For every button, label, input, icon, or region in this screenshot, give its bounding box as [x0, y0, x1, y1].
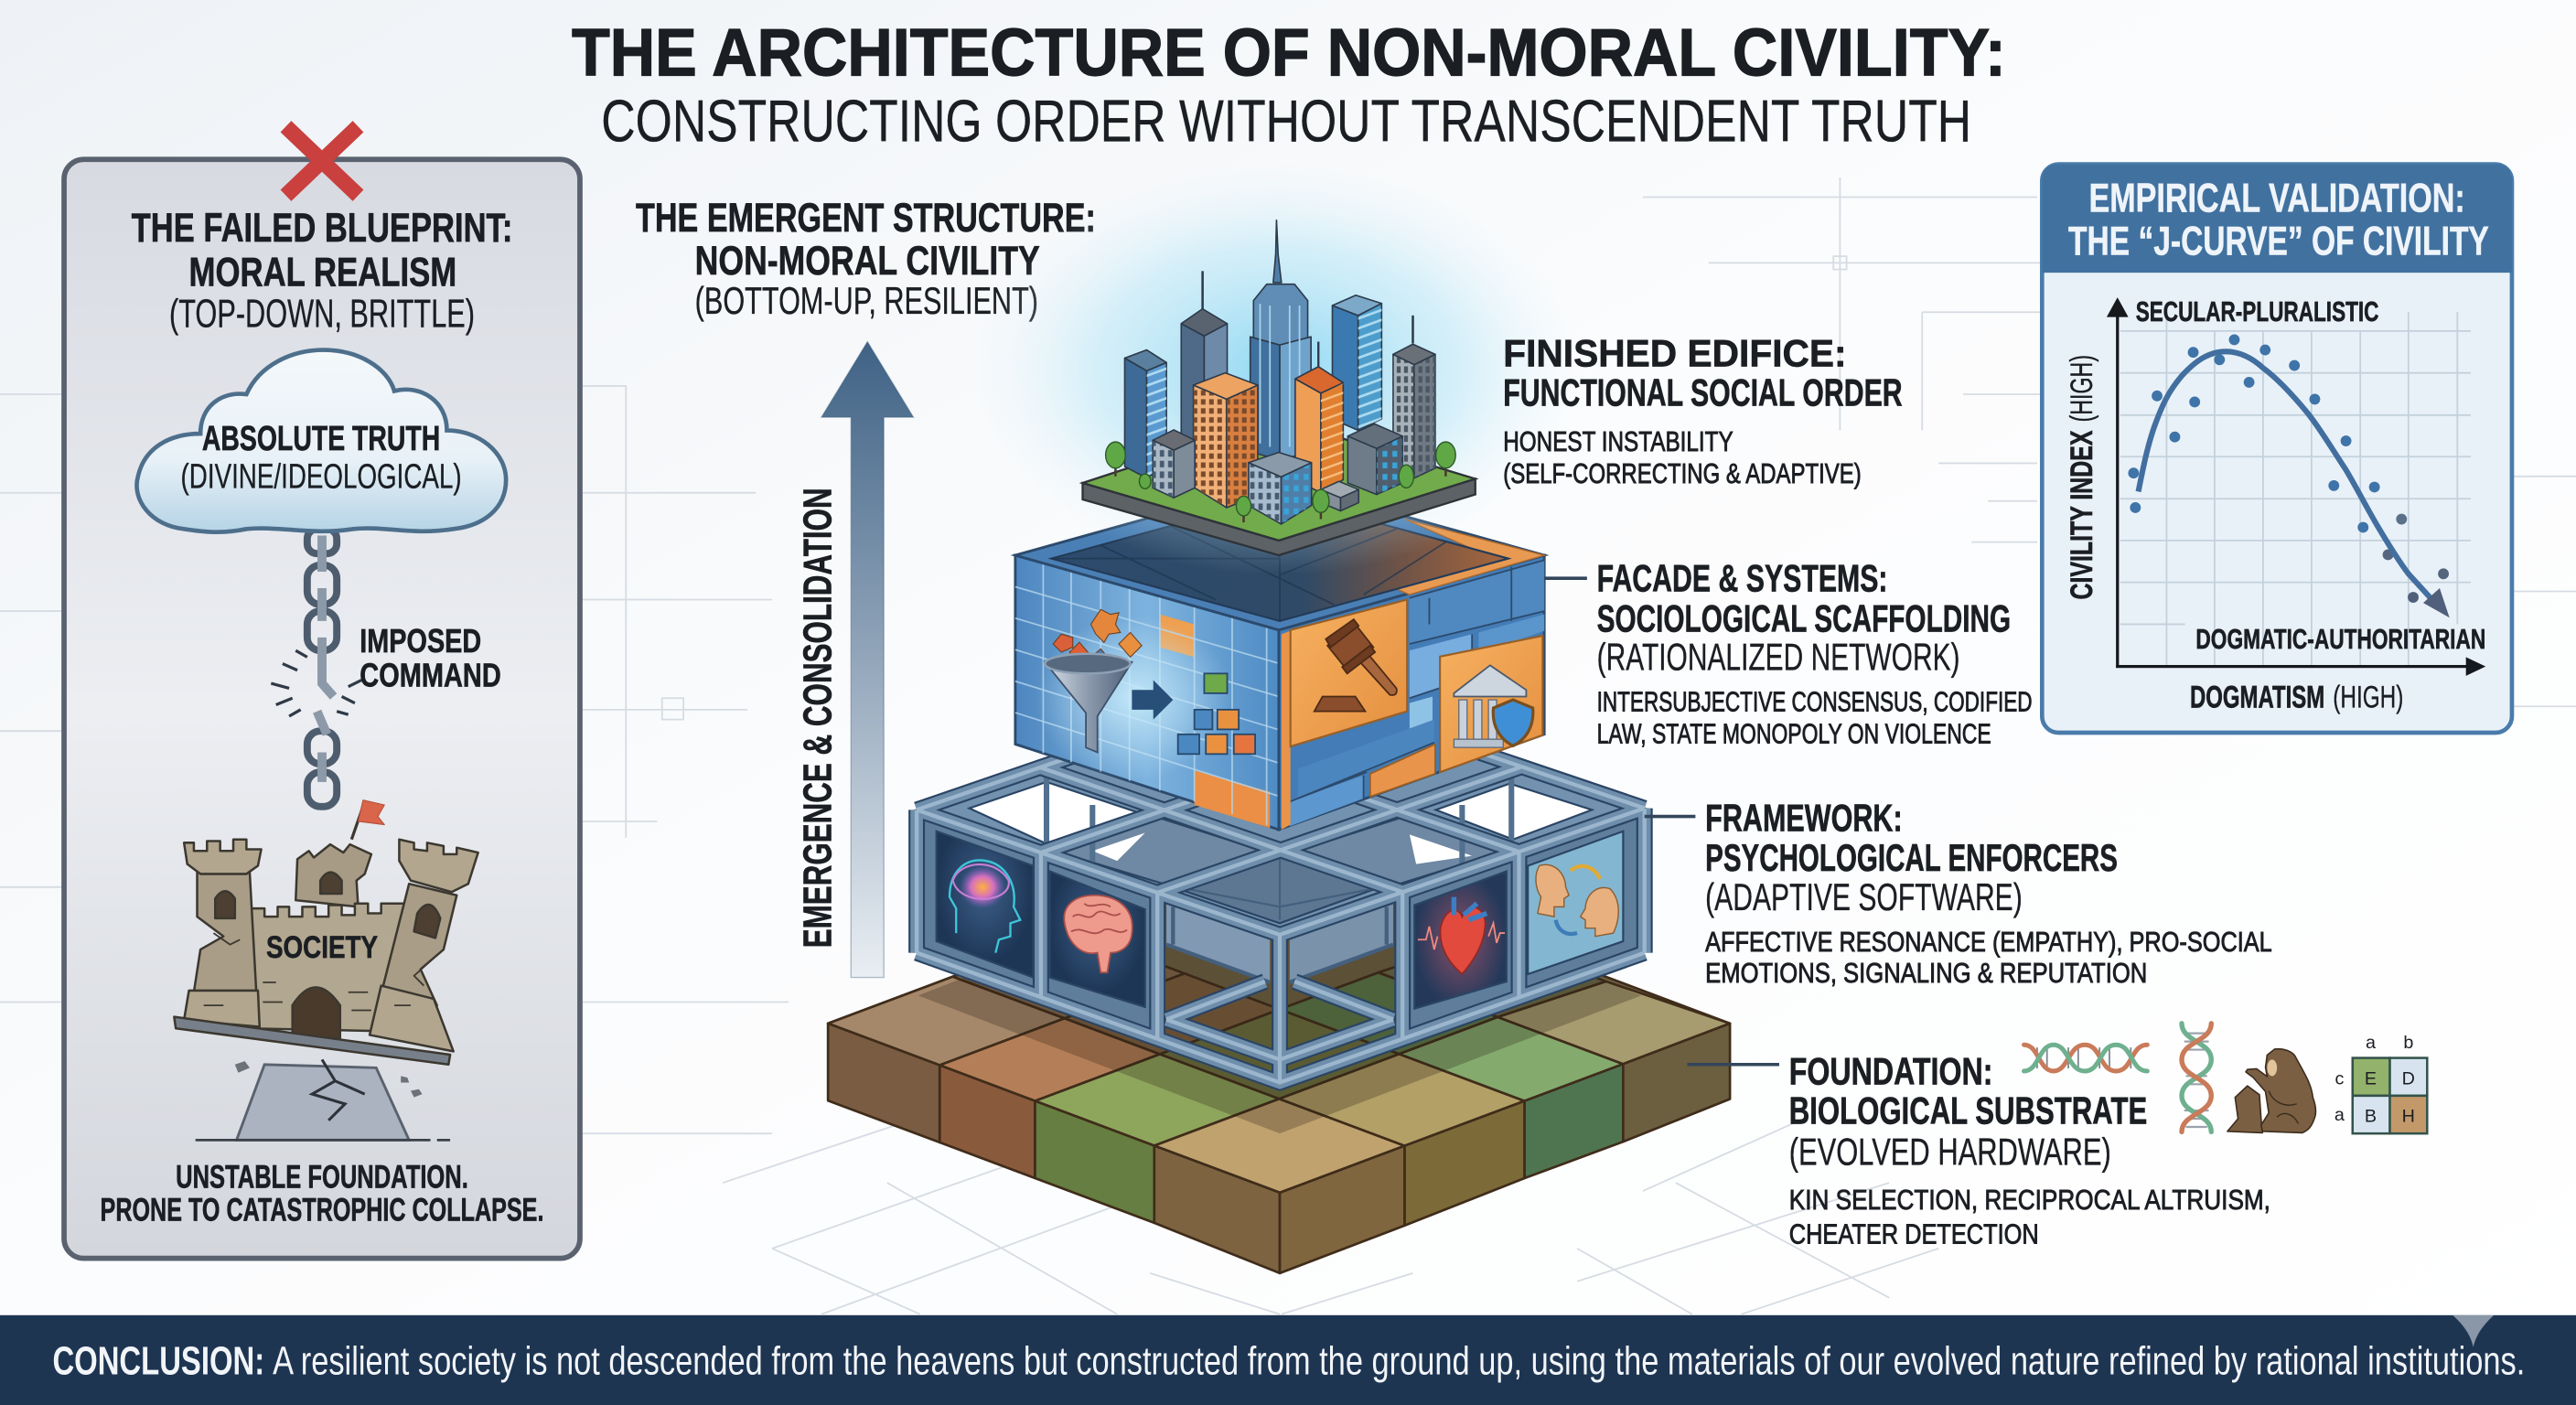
frame top deck [917, 685, 1645, 935]
icon: punnett square: b [2403, 1033, 2413, 1053]
panel heading: MORAL REALISM [189, 248, 456, 295]
icon: punnett square: c [2334, 1068, 2344, 1089]
icon: primates [2227, 1049, 2315, 1132]
title: CONSTRUCTING ORDER WITHOUT TRANSCENDENT TRUTH [601, 87, 1971, 154]
emergent structure heading: THE EMERGENT STRUCTURE: [636, 194, 1096, 241]
label: facade and systems: INTERSUBJECTIVE CONSENSUS, CODIFIED [1597, 687, 2033, 718]
panel heading: THE FAILED BLUEPRINT: [132, 204, 512, 251]
icon: temple and shield [1454, 665, 1533, 747]
icon: cloud absolute truth [136, 350, 506, 532]
chart axes [2107, 297, 2485, 676]
icon: cracked castle society [174, 800, 478, 1065]
city glow [974, 165, 1582, 575]
facade: sociological scaffolding block [1015, 481, 1544, 830]
icon: vertical dna [2182, 1024, 2211, 1132]
imposed command label [360, 622, 501, 694]
emergent structure heading [636, 194, 1096, 322]
leader lines [1544, 578, 1779, 1065]
chart annotations: SECULAR-PLURALISTIC [2136, 296, 2378, 327]
label: facade and systems: FACADE & SYSTEMS: [1597, 558, 1888, 600]
label: foundation: KIN SELECTION, RECIPROCAL ALTRUISM, [1789, 1185, 2270, 1216]
panel heading: (TOP-DOWN, BRITTLE) [169, 292, 475, 336]
icon: punnett square: B [2365, 1107, 2377, 1127]
label: framework: PSYCHOLOGICAL ENFORCERS [1705, 837, 2118, 879]
label: facade and systems [1597, 558, 2033, 750]
icon: red cross [285, 126, 359, 196]
trend curve [2139, 351, 2450, 617]
label: foundation: FOUNDATION: [1789, 1050, 1992, 1092]
label: finished edifice [1503, 332, 1903, 489]
finished edifice: functional city [974, 165, 1582, 575]
title [572, 15, 2006, 154]
label: framework: EMOTIONS, SIGNALING & REPUTATION [1705, 958, 2147, 989]
imposed command label: IMPOSED [360, 622, 481, 660]
icon: punnett square: a [2366, 1033, 2376, 1053]
emergent structure heading: (BOTTOM-UP, RESILIENT) [695, 280, 1038, 322]
icon: gavel [1315, 619, 1397, 712]
platform [1083, 419, 1476, 555]
label: finished edifice: HONEST INSTABILITY [1503, 426, 1733, 457]
icon: cloud absolute truth: ABSOLUTE TRUTH [202, 419, 440, 457]
right face with bricks [1279, 555, 1544, 830]
foundation: biological substrate slab [828, 854, 1730, 1273]
chart: j-curve scatter [2065, 296, 2485, 714]
label: foundation: CHEATER DETECTION [1789, 1219, 2039, 1250]
panel: failed blueprint [64, 126, 580, 1259]
arrow label: EMERGENCE & CONSOLIDATION [797, 488, 841, 948]
icon: horizontal dna [2024, 1045, 2147, 1071]
top rim and open interior [1015, 481, 1544, 630]
panel caption [101, 1159, 543, 1228]
panel heading [132, 204, 512, 336]
left face [1015, 555, 1279, 830]
label: foundation: BIOLOGICAL SUBSTRATE [1789, 1089, 2147, 1132]
panel caption: PRONE TO CATASTROPHIC COLLAPSE. [101, 1192, 543, 1228]
panel: glowing brain [1050, 872, 1145, 1007]
emergent structure heading: NON-MORAL CIVILITY [695, 237, 1040, 284]
icon: punnett square: H [2402, 1107, 2415, 1127]
chart annotations: CIVILITY INDEX [2065, 430, 2099, 600]
panel header: EMPIRICAL VALIDATION: [2089, 175, 2465, 221]
scatter points [2128, 334, 2449, 603]
conclusion banner [0, 1315, 2576, 1405]
panel: empirical validation [2042, 165, 2512, 733]
panel caption: UNSTABLE FOUNDATION. [176, 1159, 468, 1195]
label: finished edifice: FUNCTIONAL SOCIAL ORDER [1503, 372, 1903, 414]
icon: cracked rock foundation [196, 1059, 450, 1140]
label: foundation [1789, 1050, 2270, 1250]
trees [1106, 442, 1455, 522]
frame bays [917, 809, 1645, 1039]
title: THE ARCHITECTURE OF NON-MORAL CIVILITY: [572, 15, 2006, 91]
castle label: SOCIETY [266, 930, 378, 965]
icon: punnett square: a [2334, 1105, 2345, 1125]
icon: punnett square: E [2365, 1068, 2377, 1089]
icon: punnett square: D [2402, 1068, 2415, 1089]
framework: psychological enforcers [917, 685, 1645, 1083]
label: facade and systems: (RATIONALIZED NETWORK) [1597, 637, 1960, 679]
label: foundation: (EVOLVED HARDWARE) [1789, 1131, 2111, 1173]
icon: funnel and blocks [1045, 609, 1255, 754]
icon: punnett square [2334, 1033, 2427, 1133]
label: framework: (ADAPTIVE SOFTWARE) [1705, 876, 2023, 918]
chart annotations: DOGMATISM [2190, 680, 2324, 714]
label: framework: AFFECTIVE RESONANCE (EMPATHY), PRO-SOCIAL [1705, 927, 2272, 958]
panel: brain network head [937, 831, 1033, 978]
label: facade and systems: SOCIOLOGICAL SCAFFOLDING [1597, 598, 2011, 640]
steel frame beams [917, 685, 1645, 1083]
label: facade and systems: LAW, STATE MONOPOLY ON VIOLENCE [1597, 719, 1991, 750]
chart annotations: (HIGH) [2065, 355, 2099, 423]
label: framework [1705, 798, 2272, 989]
icon: chain [271, 529, 361, 807]
panel: reciprocal faces [1528, 831, 1623, 974]
chart annotations: DOGMATIC-AUTHORITARIAN [2195, 624, 2485, 655]
arrow: emergence and consolidation [797, 342, 914, 978]
label: framework: FRAMEWORK: [1705, 798, 1903, 840]
panel: heart [1414, 872, 1507, 1009]
panel header [2042, 165, 2512, 273]
chart annotations [2065, 296, 2485, 714]
conclusion text: CONCLUSION: [52, 1339, 264, 1383]
imposed command label: COMMAND [360, 657, 501, 694]
icon: cloud absolute truth: (DIVINE/IDEOLOGICAL) [181, 456, 462, 495]
chart annotations: (HIGH) [2333, 680, 2403, 714]
buildings [1124, 220, 1435, 524]
label: finished edifice: (SELF-CORRECTING & ADAPTIVE) [1503, 458, 1862, 489]
label: finished edifice: FINISHED EDIFICE: [1503, 332, 1847, 374]
